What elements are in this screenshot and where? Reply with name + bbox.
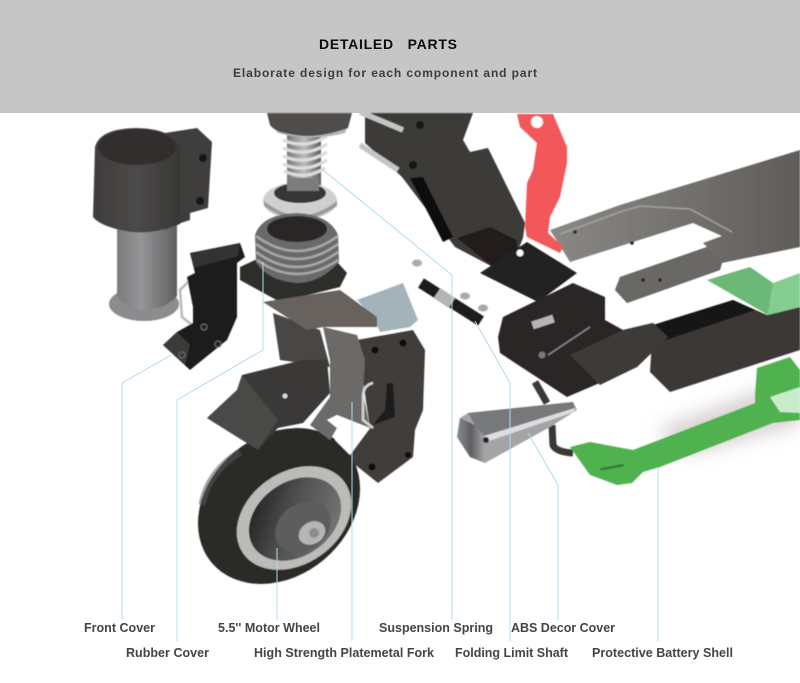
line: abs decor cover bbox=[528, 433, 558, 620]
label: protective battery shell: Protective Battery Shell bbox=[592, 646, 733, 660]
part: protective battery shell bbox=[570, 357, 800, 485]
part: deck plate bbox=[550, 150, 800, 303]
part labels bbox=[84, 621, 733, 660]
label: suspension spring: Suspension Spring bbox=[379, 621, 493, 635]
part: lever hole bbox=[531, 116, 543, 128]
label: front cover: Front Cover bbox=[84, 621, 155, 635]
part: central folding assembly bbox=[480, 242, 668, 397]
line: folding limit shaft bbox=[475, 321, 510, 641]
title: DETAILED PARTS bbox=[319, 36, 457, 52]
part: ABS decor cover bbox=[457, 402, 577, 463]
line: motor wheel bbox=[276, 548, 278, 620]
part: rubber bellows and base bbox=[240, 213, 347, 302]
part: gap behind fork bbox=[327, 415, 370, 455]
header band bbox=[0, 0, 800, 113]
part: metal bracket bbox=[357, 283, 418, 332]
part: folding limit shaft bbox=[412, 260, 488, 321]
part: fork column bbox=[273, 313, 330, 367]
part: fork plate bbox=[263, 290, 377, 440]
line: battery shell bbox=[657, 467, 659, 641]
part: kick stand bbox=[535, 382, 573, 453]
part: wheel bbox=[167, 396, 391, 616]
label: high strength fork: High Strength Platemetal Fork bbox=[254, 646, 434, 660]
part: front fender wedge bbox=[207, 360, 330, 450]
subtitle: Elaborate design for each component and part bbox=[233, 66, 537, 80]
line: rubber cover bbox=[177, 262, 263, 641]
line: suspension spring bbox=[323, 170, 452, 620]
label: abs decor cover: ABS Decor Cover bbox=[511, 621, 615, 635]
line: fork bbox=[351, 402, 353, 641]
label: folding limit shaft: Folding Limit Shaft bbox=[455, 646, 569, 660]
part: battery block bbox=[707, 267, 800, 315]
part: right fork leg bbox=[350, 330, 425, 483]
part: steering arm bbox=[360, 112, 525, 267]
label: rubber cover: Rubber Cover bbox=[126, 646, 209, 660]
callout lines bbox=[122, 170, 658, 641]
part: battery shell shadow bbox=[655, 380, 800, 455]
part: suspension head and spring bbox=[263, 113, 352, 220]
exploded scooter assembly bbox=[93, 112, 800, 616]
part: red folding lever bbox=[517, 114, 567, 253]
part: steering cup and tube bbox=[93, 128, 212, 321]
part: lower battery rail bbox=[650, 300, 800, 392]
line: front cover bbox=[122, 355, 171, 620]
part: front cover bracket bbox=[163, 243, 245, 370]
label: motor wheel: 5.5'' Motor Wheel bbox=[218, 621, 320, 635]
